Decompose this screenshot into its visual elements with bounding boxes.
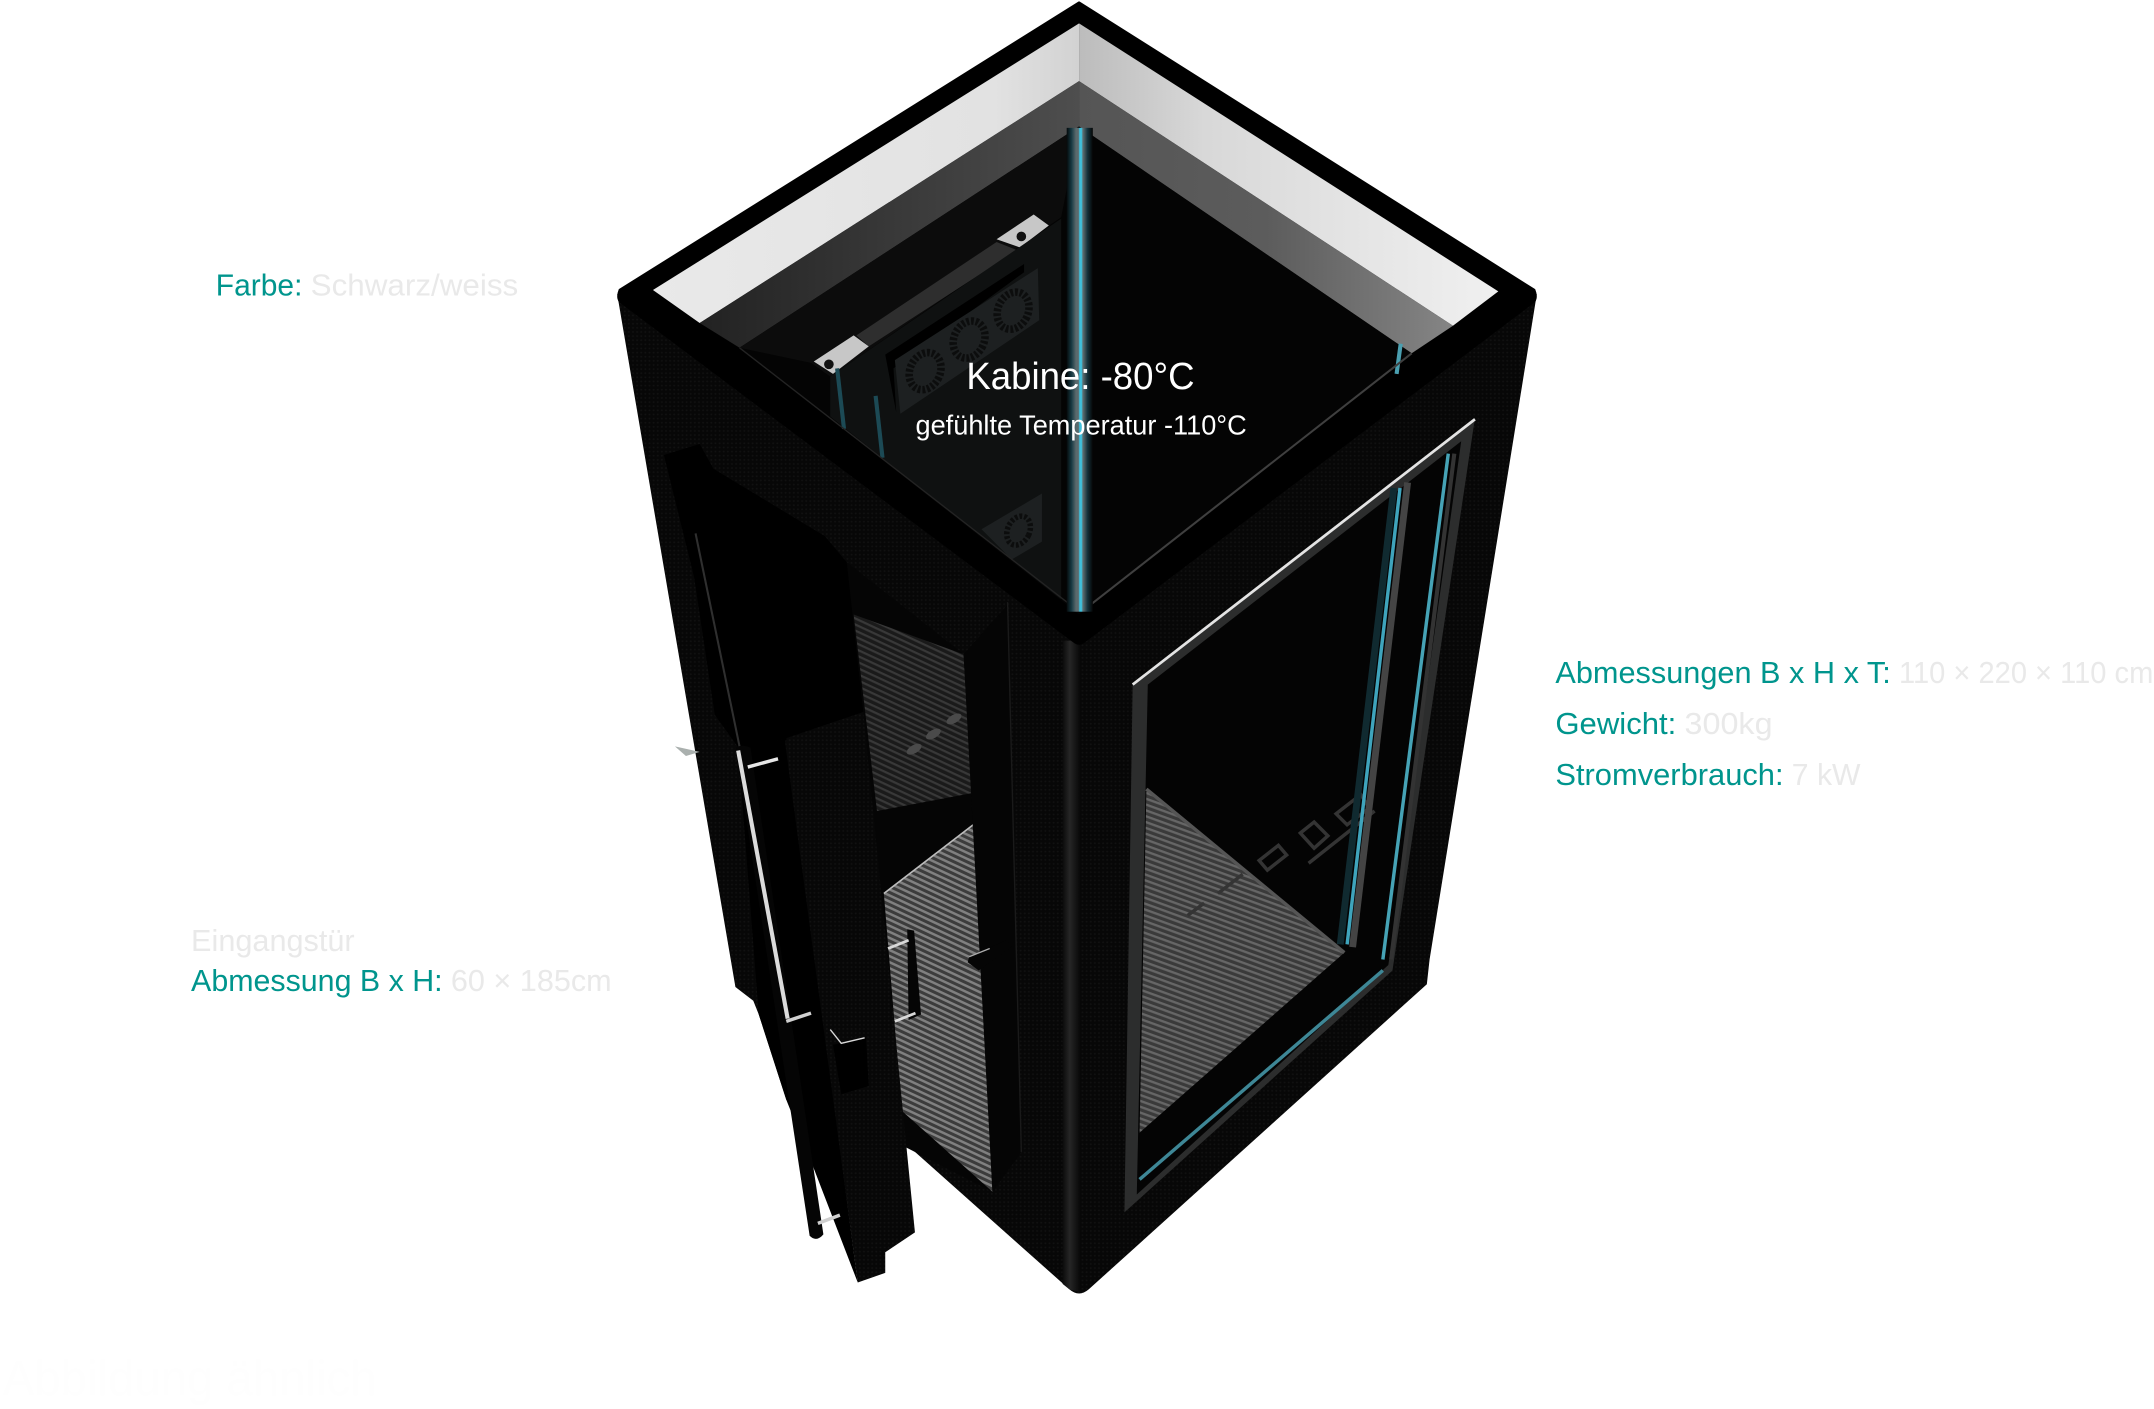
centre LED column <box>1067 128 1093 612</box>
label: dimensions, weight, power: Stromverbrauch: <box>1555 759 1784 792</box>
inner LED strip <box>1340 483 1408 947</box>
grey wall left <box>700 81 1079 348</box>
label: entrance door: Eingangstür <box>191 925 355 958</box>
white wall left <box>653 23 1079 323</box>
interior front edges <box>1089 353 1412 606</box>
mesh ceiling panel <box>854 614 972 811</box>
ceiling vents <box>905 711 963 757</box>
small door handle <box>888 929 921 1021</box>
cabinet illustration <box>617 3 1537 1294</box>
door hinge strip line <box>696 533 740 746</box>
door opening interior <box>847 562 992 1192</box>
label: cabin temperature: gefühlte Temperatur -110°C <box>915 409 1247 440</box>
upper left wall shadow <box>740 126 1079 377</box>
label: colour: Schwarz/weiss <box>311 270 518 303</box>
floor edge <box>1146 789 1344 953</box>
fan plate <box>885 264 1039 414</box>
label: dimensions, weight, power: 300kg <box>1685 708 1773 741</box>
outer LED strip <box>1383 454 1454 959</box>
label: entrance door <box>191 925 612 998</box>
open door panel <box>785 712 915 1283</box>
fans <box>903 287 1035 395</box>
cabinet body <box>617 275 1537 1294</box>
cabin floor <box>1140 789 1344 1133</box>
window frame <box>1124 418 1475 1212</box>
label: entrance door: Abmessung B x H: <box>191 965 443 998</box>
front corner strip <box>1063 641 1080 1292</box>
white bracket upper <box>997 214 1049 247</box>
white top highlight <box>1133 419 1475 685</box>
white bracket lower <box>814 335 869 374</box>
label: dimensions, weight, power <box>1555 657 2153 792</box>
label: dimensions, weight, power: 7 kW <box>1792 759 1861 792</box>
interior back walls <box>653 23 1498 353</box>
mesh band <box>856 242 1017 346</box>
interior shaft <box>740 126 1412 614</box>
label: dimensions, weight, power: Abmessungen B x H x T: <box>1555 657 1891 690</box>
sensor glint <box>675 746 700 756</box>
faint window logo, abstract strokes <box>1188 795 1375 916</box>
bottom LED strip <box>1140 970 1383 1179</box>
side window <box>1124 418 1475 1212</box>
label: colour: Farbe: <box>216 270 302 303</box>
right corner LED <box>1397 344 1401 374</box>
lower fan plate <box>981 493 1042 559</box>
label: entrance door: 60 × 185cm <box>451 965 612 998</box>
back door side and recess <box>664 444 863 749</box>
label: cabin temperature: Kabine: -80°C <box>966 355 1195 397</box>
long door handle <box>735 746 840 1239</box>
inner left wall <box>830 219 1061 599</box>
body seam <box>1008 602 1021 1152</box>
window glass <box>1137 441 1461 1195</box>
footnote: Abbildung ähnlich <box>3 1352 377 1406</box>
left LED strips <box>837 368 882 458</box>
label: cabin temperature <box>915 355 1247 440</box>
floor mesh <box>884 825 992 1192</box>
grey wall right <box>1079 81 1453 353</box>
top rim <box>619 3 1535 643</box>
door lock block <box>830 1030 869 1094</box>
white wall right <box>1079 23 1498 326</box>
body latch <box>968 940 1013 970</box>
label: colour <box>216 270 518 303</box>
label: dimensions, weight, power: Gewicht: <box>1555 708 1676 741</box>
door recess <box>738 738 858 1283</box>
door jamb <box>964 605 1021 1192</box>
